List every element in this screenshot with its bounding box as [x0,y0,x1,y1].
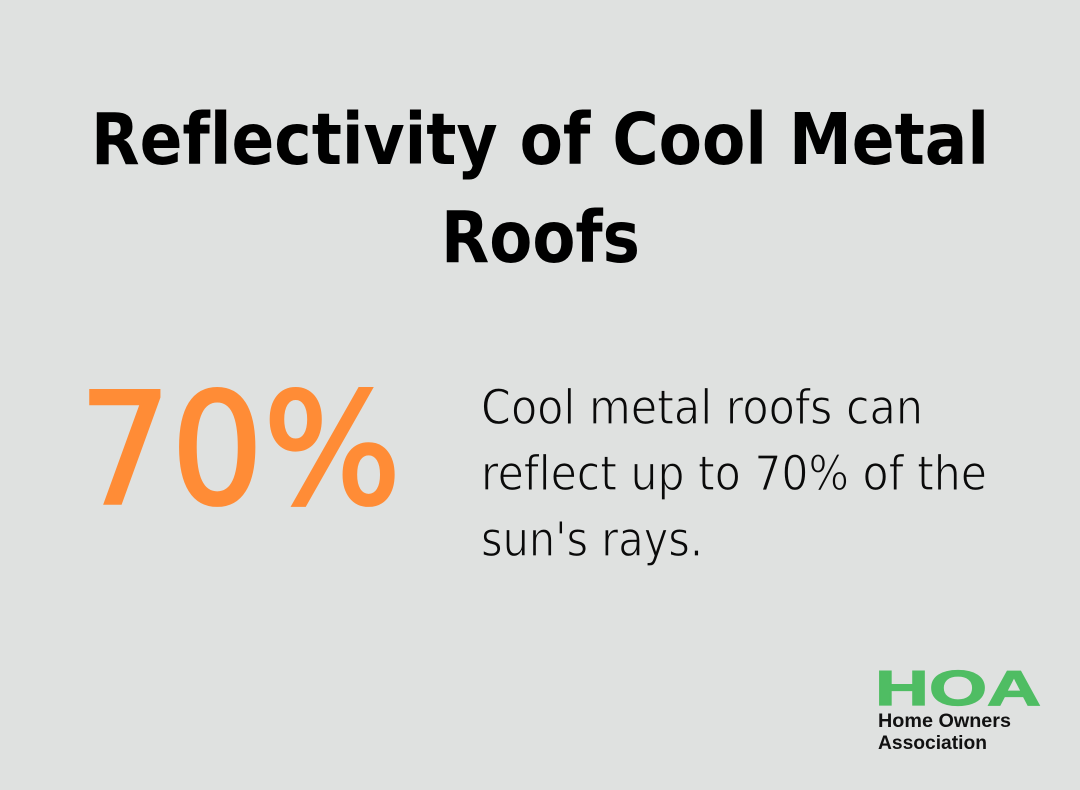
logo: HOA Home Owners Association [875,662,1041,754]
logo name: Association [878,732,987,754]
logo name [878,710,1011,754]
description text: reflect up to 70% of the [481,446,987,502]
title: Reflectivity of Cool Metal [91,98,989,181]
description text: Cool metal roofs can [481,380,923,436]
logo wordmark: HOA [875,662,1041,716]
logo name: Home Owners [878,710,1011,732]
big statistic: 70%: 70% [79,361,401,540]
description text: sun's rays. [481,512,703,568]
title: Roofs [441,196,640,279]
description text [481,380,987,568]
title [91,98,989,279]
